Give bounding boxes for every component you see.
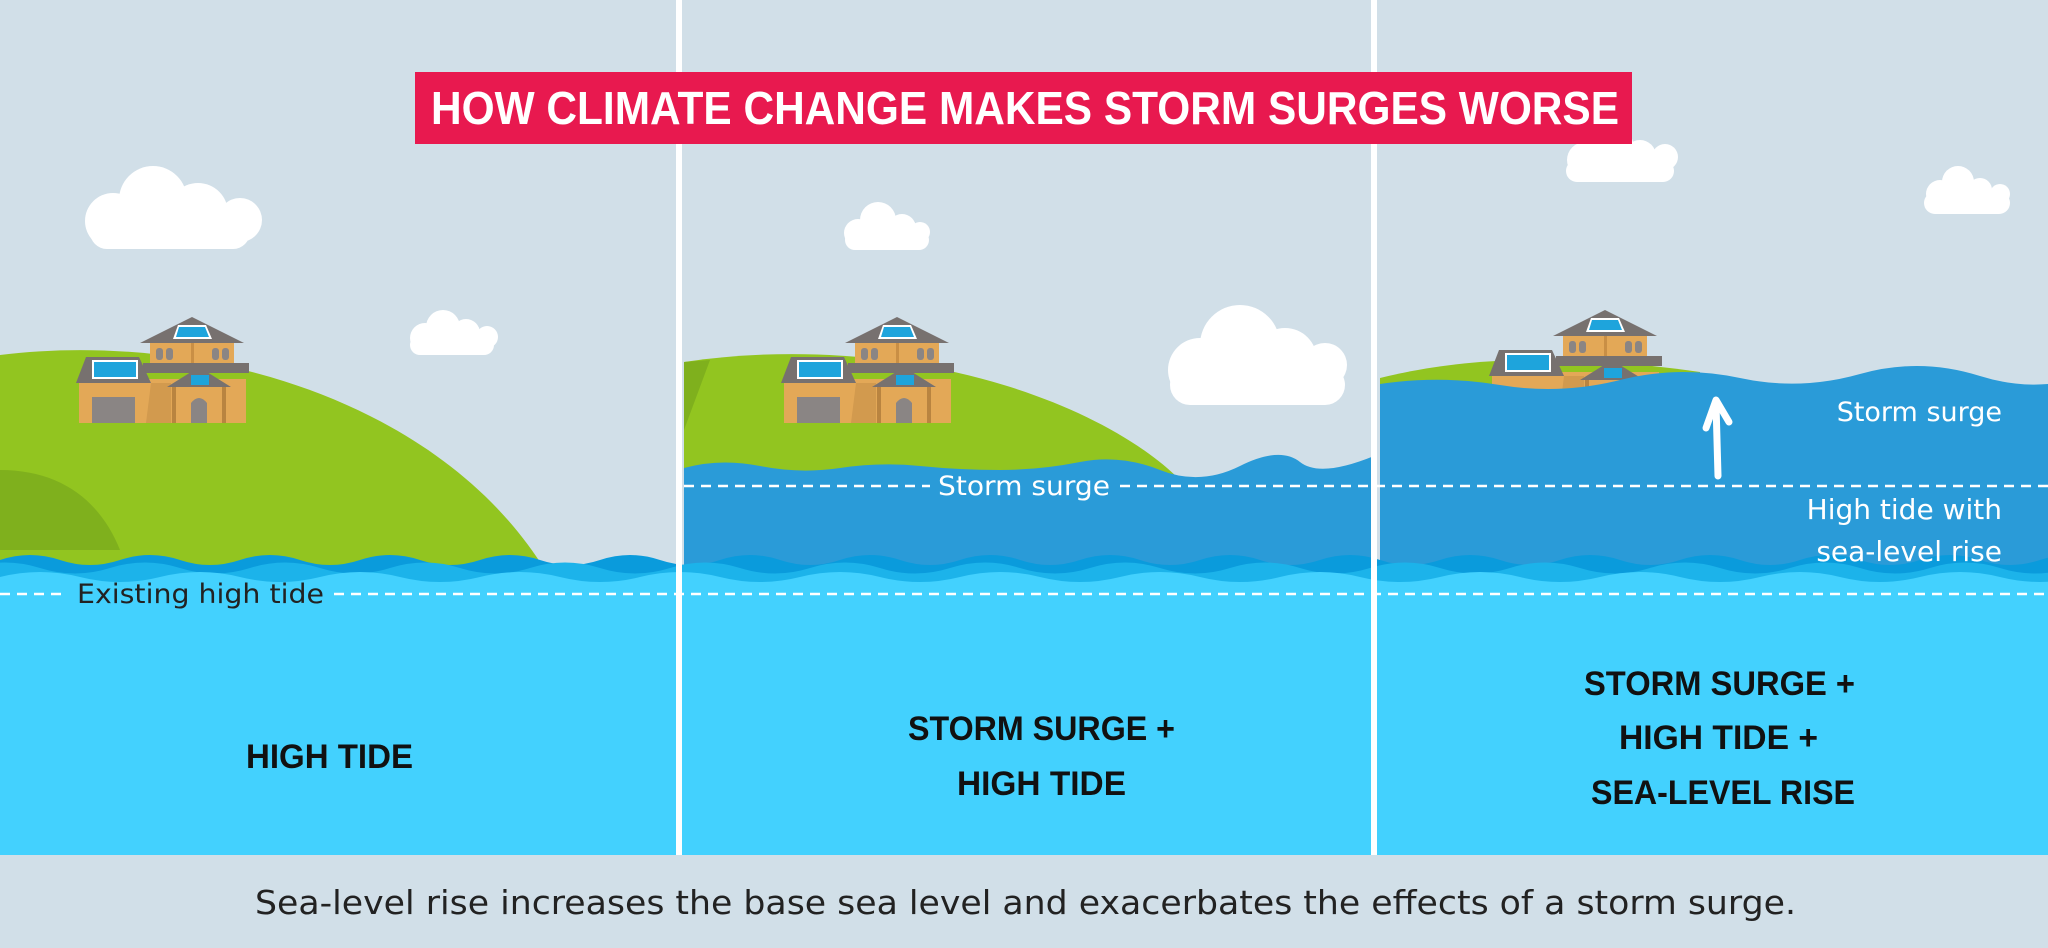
label: existing high tide: Existing high tide (77, 579, 324, 610)
caption: Sea-level rise increases the base sea level and exacerbates the effects of a storm surge. (255, 883, 1796, 922)
label: high tide with sea-level rise: High tide with (1807, 493, 2002, 526)
hill (1380, 360, 1700, 420)
arrow up (1706, 400, 1729, 476)
label: storm surge (panel 3): Storm surge (1837, 397, 2002, 428)
waves and sea (0, 555, 2048, 600)
label: storm surge + high tide: HIGH TIDE (957, 765, 1126, 803)
dividers (676, 0, 682, 855)
panel labels (246, 665, 1855, 812)
panel: storm surge + high tide + sea-level rise (1380, 126, 2048, 580)
bottom band (0, 855, 2048, 948)
storm surge water (1380, 366, 2048, 580)
house (781, 317, 954, 423)
label: storm surge + high tide + sea-level rise (1584, 665, 1855, 812)
label: high tide with sea-level rise (1807, 493, 2002, 568)
label: storm surge (panel 2): Storm surge (938, 471, 1110, 502)
dashed lines (0, 486, 2048, 594)
hill (0, 350, 545, 570)
label: storm surge + high tide: STORM SURGE + (908, 710, 1175, 748)
cloud: large (85, 166, 262, 249)
cloud: right (1924, 166, 2010, 214)
label: storm surge + high tide + sea-level rise: STORM SURGE + (1584, 665, 1855, 703)
label: storm surge + high tide (908, 710, 1175, 803)
label: high tide with sea-level rise: sea-level rise (1816, 535, 2002, 568)
title: HOW CLIMATE CHANGE MAKES STORM SURGES WORSE (431, 82, 1619, 134)
label: storm surge + high tide + sea-level rise: SEA-LEVEL RISE (1591, 774, 1855, 812)
house (76, 317, 249, 423)
cloud: top (1566, 126, 1678, 182)
hill (684, 354, 1180, 480)
cloud: large (1168, 305, 1347, 405)
storm surge water (684, 455, 1374, 580)
cloud: small (410, 310, 498, 355)
panel: storm surge + high tide (684, 202, 1374, 580)
title (415, 72, 1632, 144)
house (1489, 310, 1662, 416)
label: storm surge + high tide + sea-level rise: HIGH TIDE + (1619, 719, 1818, 757)
cloud: small (844, 202, 930, 250)
panel: high tide (0, 166, 545, 570)
label: high tide: HIGH TIDE (246, 738, 413, 776)
